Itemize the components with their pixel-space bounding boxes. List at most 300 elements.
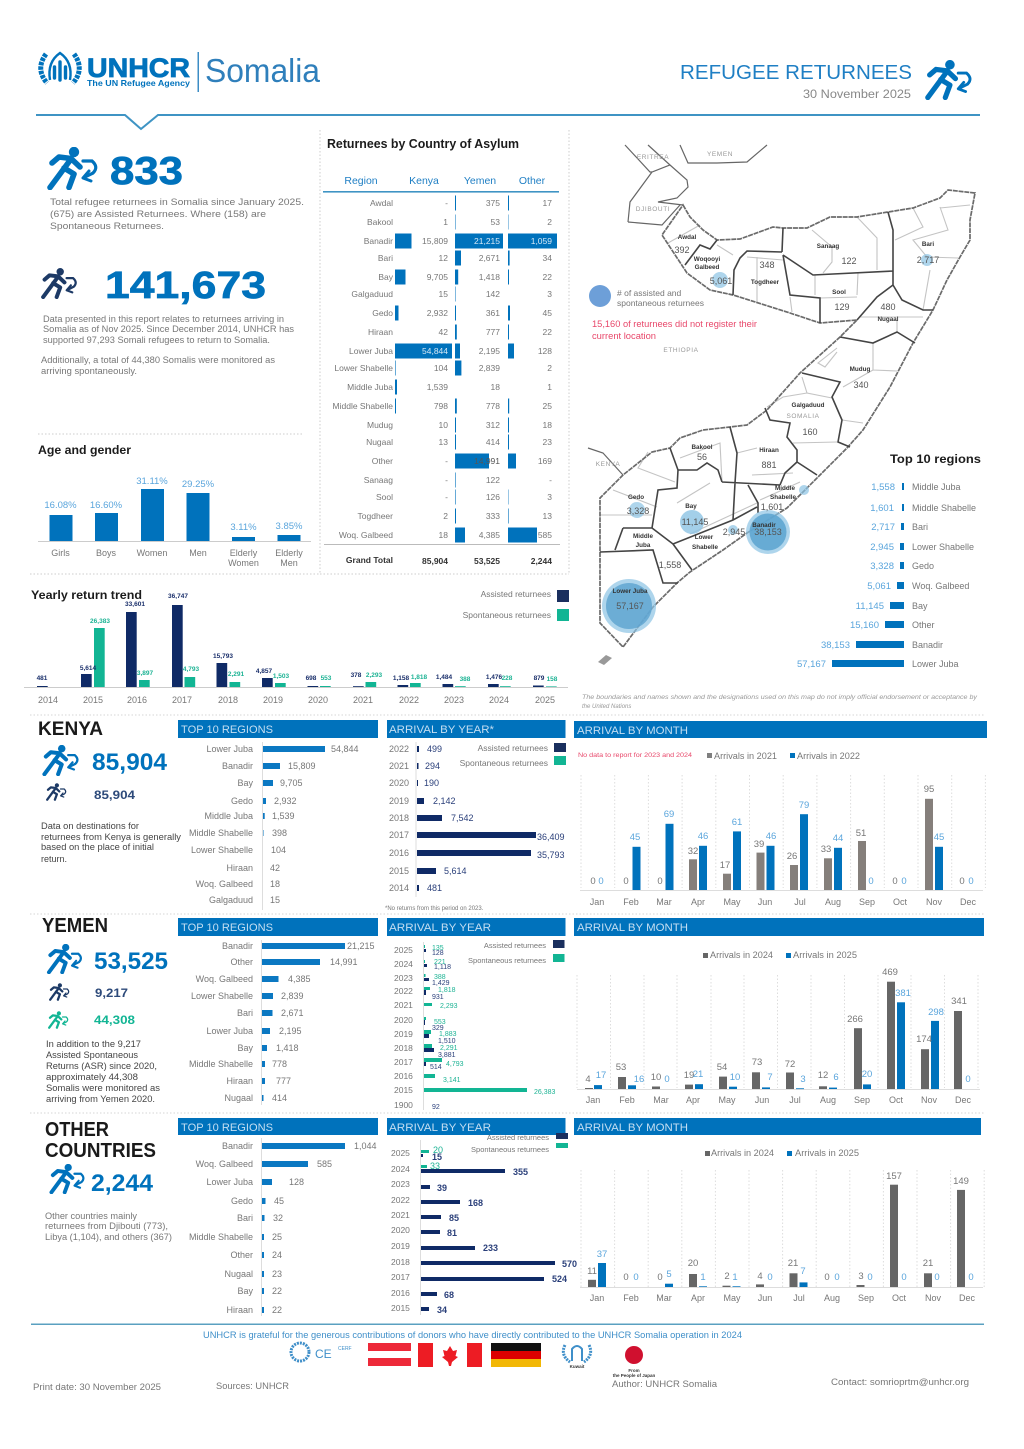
teal value labels: 3,897: [137, 670, 154, 677]
month labels: Apr: [686, 1095, 700, 1105]
header bar: TOP 10 REGIONS: [181, 922, 273, 934]
region names: Other: [912, 620, 935, 630]
map legend: circle meaning: [589, 285, 704, 308]
year labels: 2021: [389, 761, 409, 771]
gray values: 10: [651, 1072, 661, 1083]
month labels: Dec: [960, 897, 976, 907]
gray values: 11: [587, 1266, 597, 1277]
heading: KENYA: [38, 719, 103, 740]
month labels: Nov: [926, 897, 942, 907]
table region names: Lower Juba: [349, 346, 393, 356]
navy values: 168: [468, 1198, 483, 1208]
table grand total: 2,244: [531, 556, 552, 566]
blue values: 20: [862, 1069, 872, 1080]
region labels: Nugaal: [224, 1093, 253, 1103]
table values: Yemen: 361: [486, 308, 500, 318]
values: 128: [289, 1177, 304, 1187]
navy values: 1,429: [432, 980, 450, 987]
map: islands: [598, 655, 612, 665]
region labels: Middle Shabelle: [189, 1059, 253, 1069]
month labels: Feb: [623, 1293, 639, 1303]
blue values: 0: [767, 1272, 773, 1283]
month labels: Oct: [893, 897, 907, 907]
region labels: Middle Shabelle: [189, 828, 253, 838]
gray values: 21: [788, 1258, 798, 1269]
region names: Lower Shabelle: [912, 542, 974, 552]
values: 2,671: [281, 1008, 304, 1018]
month labels: May: [723, 897, 741, 907]
icon: returnee runner: [44, 745, 77, 774]
year axis labels: 2024: [489, 695, 509, 705]
panel: yearly return trend chart: [24, 588, 569, 705]
heading: YEMEN: [42, 915, 108, 937]
month labels: Aug: [825, 897, 841, 907]
table values: Kenya: -: [445, 492, 448, 502]
text: note: Returns (ASR) since 2020,: [46, 1061, 157, 1071]
month labels: Apr: [691, 1293, 705, 1303]
values: [270, 744, 359, 905]
blue values: 381: [895, 988, 911, 999]
logo: emblem with caption: [563, 1345, 591, 1369]
year labels: 2015: [389, 866, 409, 876]
year axis labels: 2020: [308, 695, 328, 705]
map: country names: [596, 151, 820, 468]
table values: Yemen: 122: [486, 475, 500, 485]
map: region names: Awdal: [678, 234, 696, 241]
gray bars: [689, 799, 933, 890]
map: region names: Hiraan: [759, 447, 779, 454]
flag: Canada: [418, 1343, 482, 1367]
year labels: 2014: [389, 883, 409, 893]
year labels: 2022: [394, 986, 413, 996]
legend: Assisted returnees: [484, 941, 546, 950]
blue values: 44: [833, 833, 843, 844]
region labels: [189, 1141, 253, 1315]
table values: Other: 2: [547, 217, 552, 227]
teal values: 1,818: [438, 987, 456, 994]
navy values: 128: [432, 950, 444, 957]
percent labels: 16.08%: [44, 500, 77, 511]
table values: Kenya: 1: [443, 217, 448, 227]
teal values: 135: [432, 945, 444, 952]
blue values: 0: [965, 1074, 971, 1085]
navy values: 524: [552, 1274, 567, 1284]
gray values: 4: [757, 1271, 763, 1282]
teal values: 26,383: [534, 1089, 556, 1096]
year labels: 1900: [394, 1100, 413, 1110]
year labels: 2018: [389, 813, 409, 823]
values: 14,991: [330, 957, 358, 967]
header bar: [574, 721, 987, 738]
month labels: Jul: [793, 1293, 805, 1303]
header: UNHCR logo and Somalia: [41, 52, 321, 92]
table region names: Awdal: [370, 198, 393, 208]
values: 35,793: [537, 850, 565, 860]
values: 190: [424, 778, 439, 788]
legend: Assisted returnees: [487, 1133, 549, 1142]
month labels: Dec: [955, 1095, 971, 1105]
bars: [262, 1143, 345, 1313]
navy value labels: [37, 593, 545, 682]
navy bars: assisted: [37, 605, 544, 688]
text: data description: supported 97,293 Somali refugees to return to Somalia.: [43, 335, 270, 345]
map: region names: Middle: [633, 533, 653, 540]
blue values: 61: [732, 817, 742, 828]
map: region values: 392: [674, 245, 690, 255]
table values: Other: 128: [538, 346, 552, 356]
navy value labels: 5,614: [80, 665, 97, 672]
text: data description: Somalia as of Nov 2025. Since December 2014, UNHCR has: [43, 324, 295, 334]
teal values: 33: [430, 1161, 440, 1171]
blue values: 21: [693, 1069, 703, 1080]
gray values: 266: [847, 1014, 863, 1025]
region labels: Middle Juba: [204, 811, 253, 821]
blue values: 46: [698, 831, 708, 842]
teal value labels: [90, 618, 558, 683]
map: region values: 1,601: [761, 502, 783, 512]
number: 833: 833: [110, 150, 183, 193]
legend: Arrivals in 2025: [795, 1148, 859, 1158]
navy values: 931: [432, 994, 444, 1001]
category labels: Men: [280, 558, 298, 568]
category labels: Elderly: [275, 548, 303, 558]
teal values: 388: [434, 974, 446, 981]
map: region names: Shabelle: [692, 544, 718, 551]
month labels: [586, 1095, 971, 1105]
gray values: 149: [953, 1176, 969, 1187]
gray values: 0: [590, 876, 596, 887]
map: country names: ERITREA: [637, 154, 669, 161]
year labels: 2015: [394, 1085, 413, 1095]
panel: Kenya arrival by month: [574, 721, 987, 907]
panel: Kenya top 10 regions: [178, 720, 378, 910]
percent labels: 16.60%: [90, 500, 123, 511]
gray values: [585, 967, 967, 1085]
values: 7,542: [451, 813, 474, 823]
flag: Japan: From: [628, 1368, 640, 1373]
navy values: [430, 950, 456, 1111]
teal bars: spontaneous: [424, 945, 527, 1092]
table values: Kenya: 798: [434, 401, 448, 411]
map: region names: [612, 234, 934, 595]
text: note: based on the place of initial: [41, 842, 154, 852]
year axis labels: 2014: [38, 695, 58, 705]
region labels: Hiraan: [226, 1076, 253, 1086]
footnote: *No returns from this period on 2023.: [385, 906, 484, 912]
values: 32: [273, 1213, 283, 1223]
text: data description: arriving spontaneously.: [41, 366, 137, 376]
navy value labels: 1,158: [393, 675, 410, 682]
year labels: 2020: [391, 1225, 410, 1235]
text: note: [45, 1211, 172, 1242]
navy value labels: 15,793: [213, 653, 233, 660]
map: country names: YEMEN: [707, 151, 733, 158]
blue values: 7: [800, 1266, 806, 1277]
values: 481: [427, 883, 442, 893]
map: region values: 3,328: [627, 506, 649, 516]
table values: Kenya: 15,809: [422, 236, 448, 246]
values: 38,153: [821, 640, 850, 651]
table values: Other: [531, 198, 552, 540]
region labels: Gedo: [231, 1196, 253, 1206]
blue values: 0: [968, 1272, 974, 1283]
teal bars: spontaneous: [421, 1150, 429, 1168]
table values: Other: 2: [547, 363, 552, 373]
blue values: [598, 800, 974, 887]
teal values: 221: [434, 959, 446, 966]
navy values: 15: [432, 1152, 442, 1162]
navy bars: assisted: [421, 1154, 555, 1311]
table values: Yemen: [474, 198, 500, 540]
year labels: 2016: [391, 1288, 410, 1298]
header bar: [387, 918, 566, 936]
values: 5,061: [867, 581, 891, 592]
region names: Woq. Galbeed: [912, 581, 969, 591]
values: 3,328: [870, 561, 894, 572]
teal values: 4,793: [446, 1061, 464, 1068]
legend: Arrivals in 2024: [710, 950, 773, 960]
table values: Other: 22: [543, 327, 552, 337]
table region names: Bay: [378, 272, 394, 282]
region names: Gedo: [912, 561, 934, 571]
values: 1,558: [871, 482, 895, 493]
header bar: [387, 720, 566, 738]
blue values: 7: [767, 1072, 773, 1083]
text: note: In addition to the 9,217: [46, 1039, 141, 1049]
blue bars: [632, 814, 943, 890]
report date: 30 November 2025: [803, 89, 911, 101]
map: region values: 56: [697, 452, 707, 462]
region labels: [189, 744, 253, 905]
header bar: [178, 918, 378, 936]
table values: Yemen: 1,418: [479, 272, 500, 282]
map: region values: 160: [802, 427, 818, 437]
map: region names: Woqooyi: [694, 256, 720, 263]
map: region values: 129: [834, 302, 850, 312]
table values: Kenya: [422, 198, 448, 540]
table values: Kenya: -: [445, 456, 448, 466]
year axis labels: 2021: [353, 695, 373, 705]
gray values: 39: [754, 839, 764, 850]
gray values: 2: [724, 1271, 730, 1282]
category labels: Men: [189, 548, 207, 558]
sources: Sources: UNHCR: [216, 1381, 290, 1391]
month labels: Jul: [789, 1095, 801, 1105]
values: 2,932: [274, 796, 297, 806]
teal values: [432, 945, 556, 1096]
values: 4,385: [288, 974, 311, 984]
map: country names: DJIBOUTI: [636, 206, 670, 213]
blue values: 17: [596, 1070, 606, 1081]
table values: Other: 13: [543, 511, 552, 521]
navy values: 329: [432, 1025, 444, 1032]
logo: UN CERF: [291, 1343, 352, 1361]
year labels: 2024: [391, 1164, 410, 1174]
blue values: [596, 988, 971, 1085]
gray values: [587, 1171, 969, 1283]
year axis labels: 2017: [172, 695, 192, 705]
percent labels: 31.11%: [136, 476, 168, 487]
map: region values: 2,945: [723, 527, 745, 537]
heading: Yearly return trend: [31, 588, 142, 602]
percent labels: 3.85%: [276, 521, 303, 532]
gray values: 72: [785, 1059, 795, 1070]
region labels: Banadir: [222, 761, 253, 771]
percent labels: [44, 476, 303, 533]
navy value labels: 1,484: [436, 674, 453, 681]
values: [272, 941, 375, 1103]
blue values: 10: [730, 1072, 740, 1083]
gray values: 0: [892, 876, 898, 887]
table values: Other: 3: [547, 492, 552, 502]
legend: Spontaneous returnees: [471, 1145, 549, 1154]
map: region values: 57,167: [616, 601, 644, 611]
logo: UN CERF: CE: [315, 1347, 332, 1361]
header bar: [387, 1118, 566, 1135]
table header: Region: [344, 175, 378, 187]
bars: [417, 746, 536, 891]
blue values: 69: [664, 809, 674, 820]
text: note: arriving from Yemen 2020.: [46, 1094, 155, 1104]
map: region names: Middle: [775, 485, 795, 492]
header bar: [574, 1118, 981, 1135]
map: country names: KENYA: [596, 461, 620, 468]
panel: Kenya arrival by year: [385, 720, 566, 912]
map: region names: Nugaal: [878, 316, 899, 323]
year axis labels: 2016: [127, 695, 147, 705]
number: total: 2,244: [91, 1170, 154, 1197]
values: 18: [270, 879, 280, 889]
year labels: 2019: [391, 1241, 410, 1251]
region labels: Middle Shabelle: [189, 1232, 253, 1242]
blue values: 1: [700, 1272, 706, 1283]
table values: Yemen: 2,195: [479, 346, 500, 356]
teal value labels: 26,383: [90, 618, 110, 625]
flag: Japan: [608, 1342, 660, 1378]
panel: Yemen top 10 regions: [178, 918, 378, 1105]
panel: map of Somalia: [588, 145, 975, 665]
month labels: Nov: [921, 1095, 937, 1105]
table values: Kenya: 2: [443, 511, 448, 521]
navy value labels: 4,857: [256, 668, 273, 675]
year axis labels: 2018: [218, 695, 238, 705]
icon: UNHCR emblem: [41, 53, 79, 83]
map disclaimer: [582, 695, 978, 710]
gray values: 54: [717, 1062, 727, 1073]
category labels: Girls: [51, 548, 70, 558]
icon: returnee runner: [49, 944, 81, 972]
region labels: Bari: [237, 1213, 253, 1223]
year labels: 2023: [391, 1179, 410, 1189]
region labels: Woq. Galbeed: [196, 974, 253, 984]
table values: Kenya: 12: [439, 253, 448, 263]
legend: [471, 1133, 568, 1154]
panel: Other countries arrival by year: [387, 1118, 577, 1315]
region names: Middle Juba: [912, 482, 961, 492]
bars: [263, 746, 325, 836]
legend: Arrivals in 2021: [714, 751, 777, 761]
table header: [344, 175, 546, 187]
table values: Yemen: 312: [486, 420, 500, 430]
gray values: 174: [916, 1034, 932, 1045]
map: region values: 2,717: [917, 255, 939, 265]
blue values: 0: [968, 876, 974, 887]
year axis labels: 2025: [535, 695, 555, 705]
navy values: 81: [447, 1228, 457, 1238]
values: 294: [425, 761, 440, 771]
year labels: 2019: [394, 1029, 413, 1039]
navy values: 355: [513, 1167, 528, 1177]
year labels: 2016: [389, 848, 409, 858]
table region names: Gedo: [372, 308, 393, 318]
map: region values: 1,558: [659, 560, 681, 570]
values: 57,167: [797, 659, 826, 670]
header bar: TOP 10 REGIONS: [181, 724, 273, 736]
flag: Austria: [368, 1343, 411, 1366]
region labels: Bari: [237, 1008, 253, 1018]
year labels: 2024: [394, 959, 413, 969]
navy value labels: 1,476: [486, 674, 503, 681]
gray values: 73: [752, 1057, 762, 1068]
table values: Yemen: 2,839: [479, 363, 500, 373]
table region names: [333, 198, 394, 540]
table values: Other: 23: [543, 437, 552, 447]
blue values: 0: [598, 876, 604, 887]
legend: [705, 1148, 859, 1158]
text: data description: Additionally, a total of 44,380 Somalis were monitored as: [41, 355, 276, 365]
region labels: Other: [230, 957, 253, 967]
blue values: 45: [934, 832, 944, 843]
heading: OTHER: [45, 1119, 110, 1141]
month labels: Mar: [656, 897, 672, 907]
table values: Other: 585: [538, 530, 552, 540]
map: region values: 122: [841, 256, 857, 266]
table values: Kenya: 10: [439, 420, 448, 430]
blue values: 0: [664, 1074, 670, 1085]
navy values: 34: [437, 1305, 447, 1315]
region labels: Galgaduud: [209, 895, 253, 905]
map: country names: ETHIOPIA: [663, 347, 699, 354]
blue values: 0: [633, 1272, 639, 1283]
month labels: Jun: [755, 1095, 769, 1105]
panel: top 10 regions: [797, 452, 981, 670]
table values: Other: -: [549, 475, 552, 485]
region labels: Hiraan: [226, 863, 253, 873]
navy values: 233: [483, 1243, 498, 1253]
number: assisted: 85,904: [94, 788, 135, 802]
blue values: 0: [834, 1272, 840, 1283]
month labels: Nov: [925, 1293, 941, 1303]
navy value labels: 481: [37, 675, 48, 682]
table values: Yemen: 21,215: [474, 236, 500, 246]
region names: Lower Juba: [912, 659, 959, 669]
values: 414: [272, 1093, 287, 1103]
map: region names: Bay: [685, 503, 697, 510]
month labels: Feb: [623, 897, 639, 907]
text: note: Other countries mainly: [45, 1211, 137, 1221]
values: 398: [272, 828, 287, 838]
gray values: 469: [882, 967, 898, 978]
gray bars: [588, 1185, 965, 1287]
header rule with chevron: [36, 115, 980, 129]
blue values: 46: [766, 831, 776, 842]
table values: Yemen: 375: [486, 198, 500, 208]
blue values: 5: [666, 1269, 672, 1280]
map: region values: [616, 245, 939, 611]
values: 45: [274, 1196, 284, 1206]
map: region names: Shabelle: [770, 494, 796, 501]
navy values: 1,510: [438, 1038, 456, 1045]
